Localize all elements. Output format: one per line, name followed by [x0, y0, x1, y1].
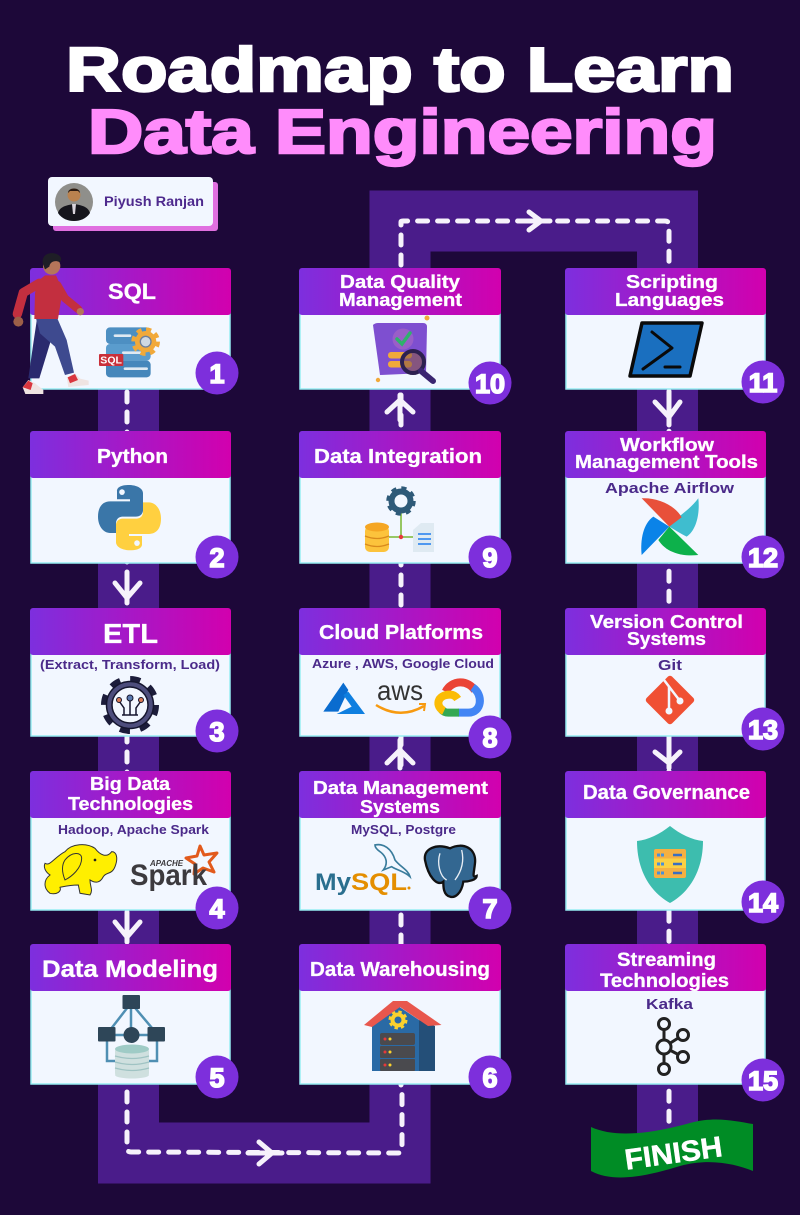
heading: Workflow Management Tools	[575, 435, 758, 472]
icon: SQL database: SQL	[100, 356, 122, 367]
panel: 13 Version Control Systems	[565, 608, 784, 750]
title: Data Engineering	[88, 98, 717, 167]
badge: 12: 12	[748, 543, 778, 573]
icon: PostgreSQL elephant	[425, 846, 477, 897]
heading: Big Data Technologies	[68, 774, 193, 814]
heading: Data Integration: Data Integration	[314, 446, 482, 468]
icon: PowerShell	[630, 323, 702, 376]
badge: 11	[742, 360, 784, 404]
title: Roadmap to Learn	[66, 36, 734, 105]
icon: Airflow pinwheel	[641, 498, 699, 555]
icon: AWS logo: aws	[377, 675, 423, 706]
icon: Git logo	[645, 675, 695, 725]
heading: Version Control Systems: Systems	[627, 629, 706, 649]
badge: 13	[742, 708, 784, 750]
badge: 4	[196, 886, 238, 930]
heading: Streaming Technologies: Streaming	[617, 950, 716, 971]
road path	[128, 221, 668, 1153]
heading: Streaming Technologies	[600, 950, 729, 992]
subtext: cloud providers: Azure , AWS, Google Cloud	[312, 656, 494, 671]
heading: Data Warehousing: Data Warehousing	[310, 959, 490, 981]
title	[66, 36, 734, 167]
heading: Scripting Languages: Scripting	[626, 272, 718, 292]
heading: Cloud Platforms: Cloud Platforms	[319, 622, 483, 644]
heading: Big Data Technologies: Big Data	[90, 774, 171, 794]
badge: 1: 1	[209, 359, 225, 389]
icon: SQL database	[99, 327, 158, 377]
badge: 11: 11	[749, 368, 777, 398]
badge: 10: 10	[475, 369, 505, 399]
badge: 15: 15	[748, 1066, 778, 1096]
heading: Data Management Systems	[313, 778, 488, 817]
badge: 3: 3	[209, 717, 225, 747]
badge: 6	[468, 1056, 512, 1098]
heading: Scripting Languages	[615, 272, 724, 310]
badge: 9: 9	[482, 543, 498, 573]
panel: 7 Data Management Systems	[299, 771, 512, 930]
heading: Data Management Systems: Systems	[360, 797, 440, 817]
heading: Workflow Management Tools: Management Tools	[575, 452, 758, 472]
badge: 15	[742, 1058, 784, 1102]
heading: Version Control Systems: Version Control	[590, 612, 743, 632]
badge: 5	[196, 1056, 238, 1098]
subtext: Git: Git	[658, 657, 682, 674]
badge: 7	[468, 886, 512, 930]
icon: ETL gear	[105, 680, 155, 730]
panel: 14 Data Governance	[565, 771, 784, 924]
icon: Apache Spark logo: APACHE	[149, 859, 184, 868]
subtext: ETL: (Extract, Transform, Load)	[40, 657, 220, 672]
panel: 2 Python	[30, 431, 238, 578]
badge: 6: 6	[482, 1063, 498, 1093]
icon: Apache Spark logo	[130, 846, 217, 892]
heading: Data Modeling: Data Modeling	[42, 956, 218, 983]
heading: Streaming Technologies: Technologies	[600, 971, 729, 992]
heading: Version Control Systems	[590, 612, 743, 649]
badge: 2: 2	[209, 543, 225, 573]
dashed route with arrows	[115, 212, 680, 1164]
panel: 5 Data Modeling	[30, 944, 238, 1098]
finish flag	[591, 1119, 753, 1178]
icon: author avatar	[55, 183, 93, 221]
icon: MySQL logo	[315, 845, 410, 896]
icon: data model diagram	[98, 995, 165, 1078]
badge: 1	[196, 352, 238, 394]
finish flag: FINISH	[623, 1131, 724, 1177]
icon: MySQL logo: My	[315, 869, 352, 896]
panel: 6 Data Warehousing	[299, 944, 512, 1098]
icon: MySQL logo: SQL	[351, 869, 407, 896]
icon: quality report	[373, 316, 433, 382]
subtext: Apache Airflow: Apache Airflow	[605, 480, 734, 497]
subtext: MySQL, Postgre: MySQL, Postgre	[351, 822, 456, 837]
heading: Data Management Systems: Data Management	[313, 778, 488, 798]
badge: 8: 8	[482, 723, 498, 753]
badge: 14	[742, 880, 784, 924]
badge: 10	[468, 362, 512, 404]
heading: Data Quality Management: Management	[339, 290, 462, 310]
heading: SQL: SQL	[108, 279, 156, 304]
badge: 7: 7	[482, 894, 498, 924]
heading: Data Governance: Data Governance	[583, 782, 750, 804]
badge: 14: 14	[748, 888, 778, 918]
heading: ETL: ETL	[103, 618, 158, 649]
panel: 11 Scripting Languages	[565, 268, 784, 404]
panel: 4 Big Data Technologies	[30, 771, 238, 930]
icon: Azure logo	[323, 683, 365, 714]
panel: 12 Workflow Management Tools	[565, 431, 784, 578]
badge: 13: 13	[748, 715, 778, 745]
panel: 10 Data Quality Management	[299, 268, 512, 404]
icon: walking character	[13, 253, 89, 394]
subtext: Kafka: Kafka	[646, 996, 694, 1013]
heading: Scripting Languages: Languages	[615, 290, 724, 310]
panel: 8 Cloud Platforms	[299, 608, 512, 758]
panel: 1 SQL	[30, 268, 238, 394]
badge: 12	[742, 536, 784, 578]
badge: 3	[196, 710, 238, 752]
icon: Hadoop elephant	[44, 845, 117, 895]
panel: 15 Streaming Technologies	[565, 944, 784, 1102]
author badge	[48, 177, 218, 231]
panel: 3 ETL	[30, 608, 238, 752]
badge: 9	[468, 536, 512, 578]
icon: Google Cloud logo	[438, 682, 480, 713]
badge: 8	[468, 716, 512, 758]
author name: Piyush Ranjan	[104, 194, 204, 209]
subtext: Hadoop, Apache Spark: Hadoop, Apache Spark	[58, 822, 210, 837]
heading: Python: Python	[97, 446, 168, 468]
icon: Kafka logo	[657, 1018, 688, 1074]
icon: Python logo	[98, 485, 161, 550]
icon: governance shield	[637, 826, 703, 903]
badge: 5: 5	[209, 1063, 225, 1093]
heading: Data Quality Management: Data Quality	[340, 272, 460, 292]
heading: Big Data Technologies: Technologies	[68, 794, 193, 814]
heading: Workflow Management Tools: Workflow	[620, 435, 715, 455]
icon: Apache Spark logo: Spark	[130, 859, 207, 892]
badge: 2	[196, 536, 238, 578]
panel: 9 Data Integration	[299, 431, 512, 578]
badge: 4: 4	[209, 894, 225, 924]
heading: Data Quality Management	[339, 272, 462, 310]
icon: data integration	[365, 488, 434, 552]
icon: warehouse	[364, 1001, 442, 1071]
